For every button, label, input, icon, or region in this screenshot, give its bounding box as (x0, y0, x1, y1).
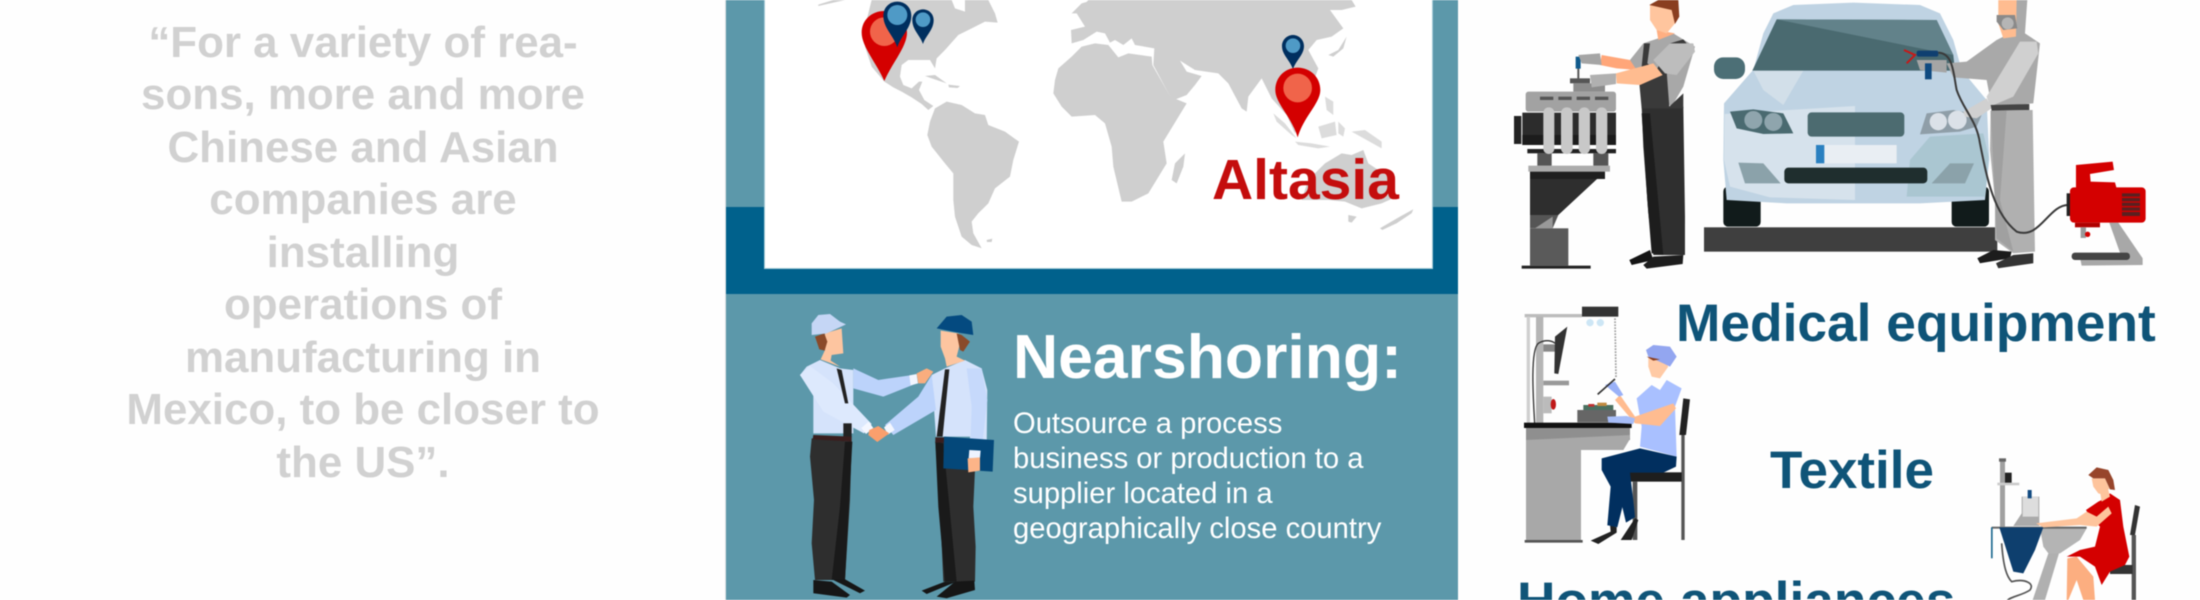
illustration: car being painted (1704, 0, 2146, 268)
quote text: “For a variety of rea- (148, 18, 578, 67)
label: Altasia: Altasia (1212, 148, 1400, 212)
illustration: mechanic and engine (1514, 0, 1695, 269)
mechanic figure (1578, 0, 1695, 269)
chair (1629, 398, 1690, 540)
chair (2110, 505, 2140, 600)
label: Textile: Textile (1770, 441, 1934, 500)
quote text: sons, more and more (141, 70, 585, 119)
worker (1591, 345, 1682, 544)
definition text (1013, 408, 1382, 545)
map pin: large red Mexico (862, 11, 907, 81)
illustration: textile worker at sewing machine (1991, 458, 2140, 600)
panel: teal nearshoring panel (725, 0, 1458, 600)
quote text (126, 18, 600, 487)
definition text: supplier located in a (1013, 478, 1273, 510)
quote text: companies are (209, 175, 517, 224)
quote text: operations of (224, 280, 502, 329)
definition text: business or production to a (1013, 443, 1364, 475)
paint compressor (2067, 162, 2146, 266)
Eurasia, Africa, Oceania (1053, 0, 1413, 230)
platform (1704, 227, 1997, 252)
seamstress (2036, 467, 2129, 600)
Americas (818, 0, 1093, 248)
world map (818, 0, 1413, 248)
definition text: geographically close country (1013, 513, 1382, 545)
engine stand (1514, 57, 1616, 269)
painter (1904, 0, 2068, 268)
quote text: Chinese and Asian (167, 123, 559, 172)
sewing machine (1991, 458, 2087, 600)
map pin: blue USA large (883, 2, 911, 47)
map pin: large red Asia (1275, 68, 1320, 137)
quote text: Mexico, to be closer to (126, 385, 600, 434)
map pin: blue China (1282, 35, 1304, 69)
heading: Nearshoring: Nearshoring: (1013, 322, 1402, 392)
quote text: the US”. (276, 438, 450, 487)
definition text: Outsource a process (1013, 408, 1282, 440)
illustration: two men shaking hands (800, 314, 994, 598)
clasped hands (868, 426, 889, 442)
quote text: manufacturing in (185, 333, 541, 382)
left man (800, 314, 918, 598)
label: Medical equipment: Medical equipment (1676, 294, 2156, 353)
right man (884, 315, 994, 598)
map pin: blue USA small (912, 9, 934, 44)
quote text: installing (267, 228, 459, 277)
car (1714, 3, 1989, 227)
illustration: medical equipment worker (1524, 307, 1690, 544)
workstation (1524, 307, 1632, 543)
